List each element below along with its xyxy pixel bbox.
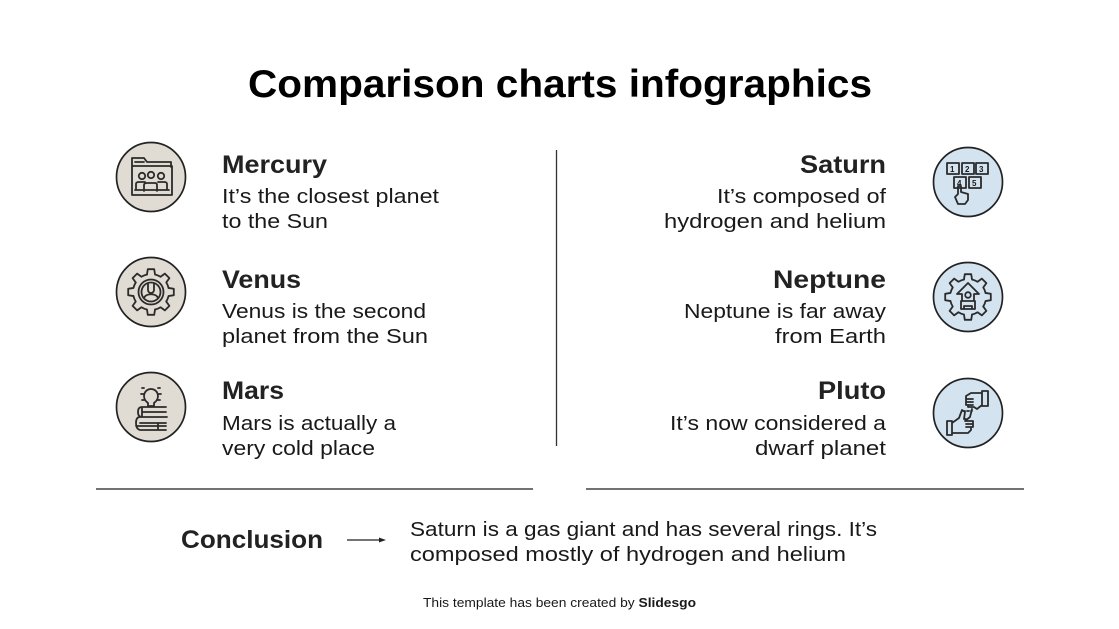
icon: numbered keys with finger: 5 xyxy=(972,179,977,188)
text: Neptune description: Neptune is far away xyxy=(684,300,887,323)
arrow xyxy=(347,538,386,542)
text: Venus description: planet from the Sun xyxy=(222,325,428,348)
text: Mars description: Mars is actually a xyxy=(222,412,397,435)
icon: two hands xyxy=(934,378,1002,448)
icon: numbered keys with finger: 2 xyxy=(965,165,970,174)
text: Mercury description xyxy=(222,185,439,233)
text: Saturn description: hydrogen and helium xyxy=(664,210,886,233)
text: conclusion body: composed mostly of hydrogen and helium xyxy=(410,543,846,566)
heading: Mars: Mars xyxy=(222,377,284,405)
text: Mercury description: to the Sun xyxy=(222,210,328,233)
icon: numbered keys with finger xyxy=(934,148,1002,216)
icon: gear with house xyxy=(934,262,1002,332)
heading: Neptune: Neptune xyxy=(773,266,886,294)
text: Neptune description xyxy=(684,300,887,348)
title: Comparison charts infographics xyxy=(248,63,872,106)
panel: Pluto xyxy=(670,377,1002,460)
icon: numbered keys with finger: 1 xyxy=(950,165,955,174)
text: Pluto description: dwarf planet xyxy=(755,437,886,460)
text: Venus description xyxy=(222,300,428,348)
icon: books with light bulb xyxy=(116,372,186,442)
heading: Pluto: Pluto xyxy=(818,377,886,405)
text: Venus description: Venus is the second xyxy=(222,300,426,323)
icon: numbered keys with finger: 3 xyxy=(979,165,984,174)
heading: Saturn: Saturn xyxy=(800,151,886,179)
panel: Venus xyxy=(116,258,428,348)
panel: Neptune xyxy=(684,262,1002,348)
text: Mars description xyxy=(222,412,397,460)
text: Pluto description xyxy=(670,412,887,460)
text: Pluto description: It’s now considered a xyxy=(670,412,887,435)
text: Saturn description xyxy=(664,185,886,233)
panel: Saturn xyxy=(664,148,1002,233)
text: Mars description: very cold place xyxy=(222,437,375,460)
icon: numbered keys with finger: 4 xyxy=(957,179,962,188)
text: Saturn description: It’s composed of xyxy=(717,185,886,208)
text: Mercury description: It’s the closest planet xyxy=(222,185,439,208)
text: Neptune description: from Earth xyxy=(775,325,886,348)
panel: Mars xyxy=(116,372,397,460)
heading: Mercury: Mercury xyxy=(222,151,327,179)
panel: Mercury xyxy=(116,142,439,233)
heading: Venus: Venus xyxy=(222,266,301,294)
icon: gear with person xyxy=(116,258,186,326)
icon: folder with people xyxy=(116,142,186,212)
text: conclusion body: Saturn is a gas giant and has several rings. It’s xyxy=(410,518,877,541)
heading: Conclusion: Conclusion xyxy=(181,526,323,554)
text: conclusion body xyxy=(410,518,877,566)
credit line: This template has been created by Slidesgo xyxy=(423,596,696,610)
